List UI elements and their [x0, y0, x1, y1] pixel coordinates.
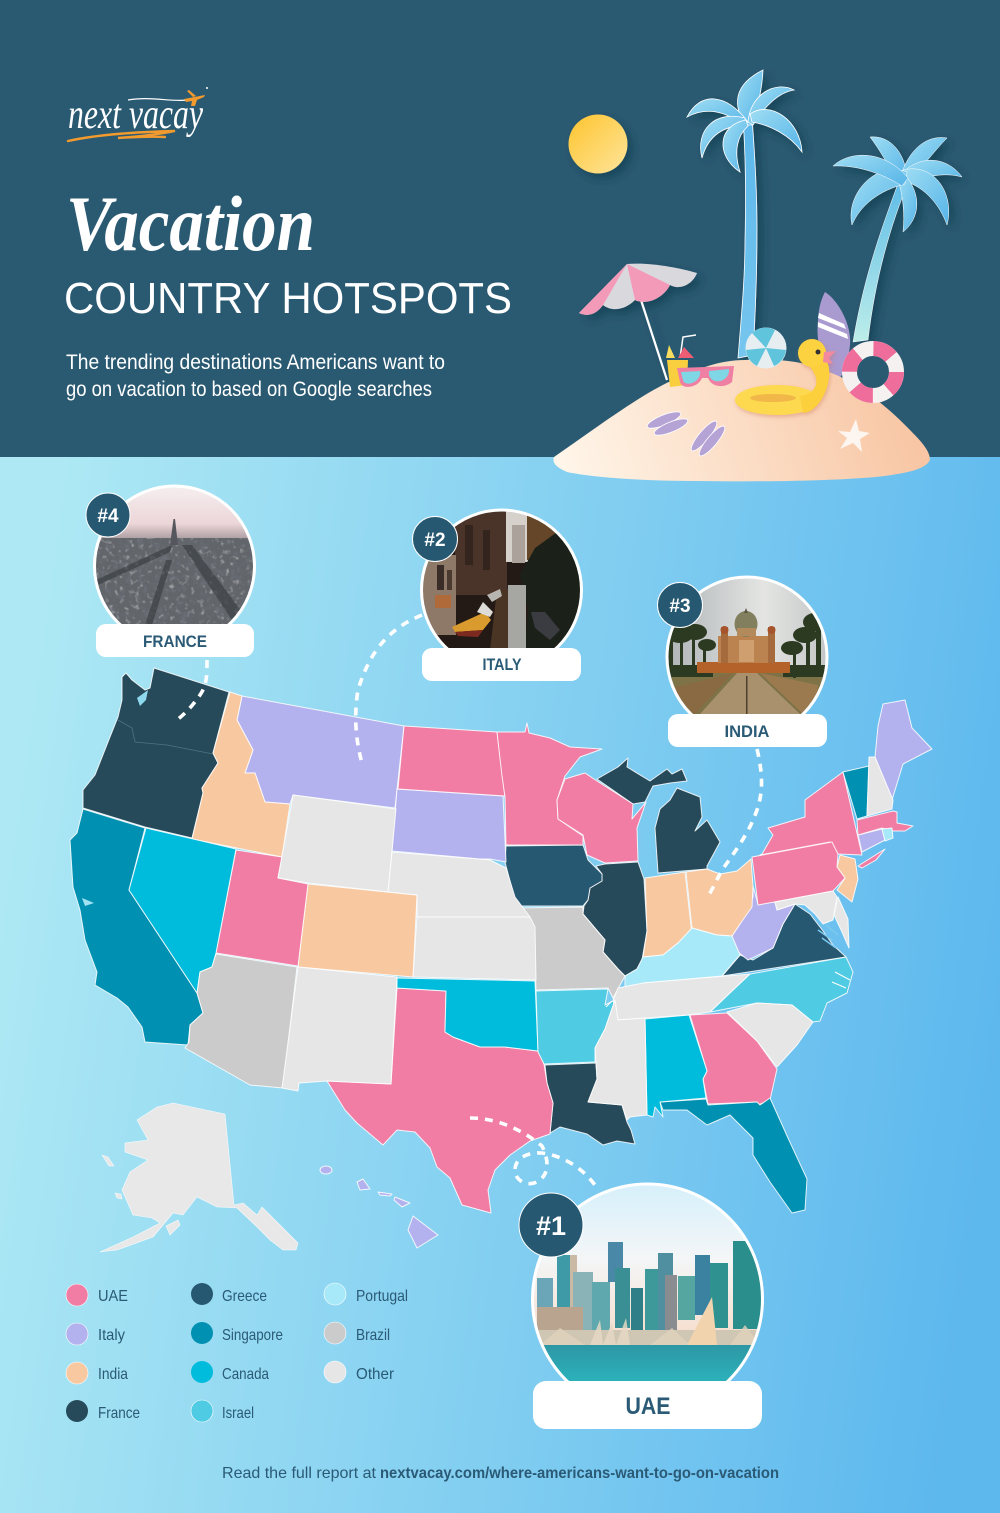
icon: beach umbrella	[579, 264, 697, 380]
badge: #2: #2	[424, 530, 446, 551]
legend item: Brazil: Brazil	[356, 1327, 390, 1344]
badge: #4	[86, 493, 130, 537]
logo: next vacay: next vacay	[68, 92, 203, 138]
legend item: Other	[324, 1361, 395, 1383]
background gradient panel	[0, 457, 1000, 1513]
icon: island sand	[553, 359, 930, 481]
legend item: Italy	[66, 1323, 125, 1345]
legend item: France	[66, 1400, 140, 1422]
legend item: Portugal: Portugal	[356, 1288, 408, 1305]
state: Alaska	[100, 1103, 298, 1252]
label: UAE	[533, 1381, 762, 1429]
label: France	[96, 624, 254, 657]
illustration: beach island	[553, 70, 962, 481]
coastal details on the map	[82, 690, 850, 1007]
legend item: Israel: Israel	[222, 1405, 254, 1422]
state group: Israel (Arkansas, North Carolina)	[536, 957, 853, 1064]
icon: duck float	[735, 339, 836, 415]
route: UAE	[470, 1118, 597, 1188]
intro text: go on vacation to based on Google searches	[66, 378, 432, 401]
legend item: Greece	[191, 1283, 267, 1305]
label: India	[668, 714, 827, 747]
state group: Italy (Montana, South Dakota, West Virginia, Connecticut, Maine)	[237, 696, 932, 960]
footer text: nextvacay.com/where-americans-want-to-go-on-vacation	[380, 1465, 779, 1482]
badge: #3: #3	[669, 596, 691, 617]
legend item: UAE	[66, 1284, 128, 1306]
icon: drink	[666, 335, 696, 387]
state group: UAE (North Dakota, Minnesota, Wisconsin, Utah, Texas, Georgia, New York, Pennsylvania, Massachusetts)	[216, 723, 913, 1213]
state group: Brazil (Arizona, Missouri)	[185, 907, 625, 1088]
icon: beach ball	[746, 328, 786, 368]
legend item: Other: Other	[356, 1366, 395, 1383]
photo card: France	[86, 485, 256, 657]
legend	[66, 1283, 408, 1422]
legend item: Canada: Canada	[222, 1366, 269, 1383]
badge: #2	[412, 516, 458, 562]
badge: #3	[658, 582, 702, 628]
label: Italy: ITALY	[482, 655, 522, 674]
photo frame	[532, 1184, 762, 1414]
label: France: FRANCE	[143, 632, 207, 651]
legend item: Singapore	[191, 1322, 283, 1344]
state: Hawaii	[320, 1166, 438, 1248]
icon: starfish	[838, 419, 870, 452]
label: Italy	[422, 648, 581, 681]
icon: tall palm tree	[687, 70, 802, 358]
photo: Paris skyline	[96, 488, 253, 624]
intro text	[66, 351, 445, 401]
map of US states	[70, 668, 932, 1252]
legend item: Portugal	[324, 1283, 408, 1305]
photo: Venice canal	[423, 512, 580, 648]
legend item: Canada	[191, 1361, 269, 1383]
photo frame	[94, 486, 254, 646]
title: Country Hotspots: COUNTRY HOTSPOTS	[64, 275, 512, 323]
state group: Other	[278, 757, 893, 1120]
legend item: Israel	[191, 1400, 254, 1422]
logo: next vacay	[68, 87, 208, 141]
intro text: The trending destinations Americans want to	[66, 351, 445, 374]
photo frame	[422, 510, 582, 670]
photo frame	[667, 577, 827, 737]
icon: surfboard	[817, 292, 850, 380]
badge: #4: #4	[97, 506, 119, 527]
legend item: Brazil	[324, 1322, 390, 1344]
state group: Singapore (California, Florida, Vermont)	[70, 766, 869, 1213]
label: India: INDIA	[724, 722, 770, 741]
icon: sunglasses	[677, 366, 734, 387]
route: Italy	[356, 615, 422, 763]
footer text: Read the full report at	[222, 1465, 377, 1482]
photo card: UAE	[519, 1184, 765, 1429]
legend item: Greece: Greece	[222, 1288, 267, 1305]
footer text	[222, 1465, 779, 1482]
title: Vacation: Vacation	[66, 180, 315, 267]
icon: sun	[568, 114, 628, 174]
state group: Greece (Iowa, Virginia)	[505, 845, 846, 976]
badge: #1: #1	[536, 1211, 566, 1241]
legend item: Singapore: Singapore	[222, 1327, 283, 1344]
state group: France (Washington, Oregon, Illinois, Louisiana, Michigan)	[83, 668, 720, 1145]
state group: Portugal (Kentucky, Rhode Island)	[625, 828, 893, 987]
photo card: Italy	[412, 508, 585, 681]
legend item: France: France	[98, 1405, 140, 1422]
photo card: India	[658, 575, 830, 747]
label: UAE: UAE	[626, 1393, 670, 1420]
state group: India (Idaho, Colorado, Indiana, Ohio, New Jersey)	[192, 692, 858, 977]
icon: swim ring	[850, 348, 896, 396]
photo: Safdarjung's Tomb	[665, 575, 830, 717]
header panel	[0, 0, 1000, 457]
legend item: India	[66, 1362, 128, 1384]
legend item: Italy: Italy	[98, 1327, 125, 1344]
photo: Dubai skyline and fountain	[530, 1184, 765, 1385]
route: France	[177, 660, 207, 720]
badge: #1	[519, 1193, 583, 1257]
legend item: India: India	[98, 1366, 128, 1383]
route: India	[708, 749, 762, 897]
icon: short palm tree	[833, 137, 962, 342]
state group: Canada (Nevada, Oklahoma, Alabama)	[129, 828, 707, 1117]
legend item: UAE: UAE	[98, 1288, 128, 1305]
icon: flip flops	[645, 409, 728, 459]
